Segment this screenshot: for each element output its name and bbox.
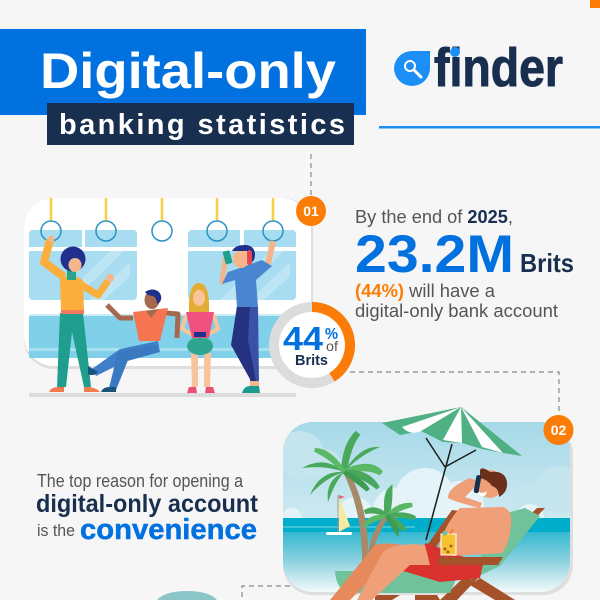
orange corner accent [590,0,600,8]
person: standing man with phone [222,241,273,393]
palm trees [302,433,415,562]
badge 01: 01 [303,203,319,219]
badge 02 [544,415,574,445]
donut: 44% of Brits: Brits [295,352,328,369]
badge 01 [296,196,326,226]
person: standing left [44,236,114,392]
person: seated man [88,290,178,392]
train windows [29,230,296,300]
text block: top reason: is the [37,521,75,540]
header rule [379,126,600,128]
text block: top reason: convenience [80,514,257,546]
text block: 23.2M Brits: (44%) will have a [355,281,496,301]
donut: 44% of Brits: of [326,338,338,354]
title: Digital-only [40,43,336,99]
beach scene background [276,422,584,592]
text block: 23.2M Brits [355,207,574,321]
donut: 44% of Brits [274,307,350,383]
seat band [29,314,294,358]
title [0,29,366,145]
text block: 23.2M Brits: digital-only bank account [355,301,558,321]
finder logo [394,38,563,98]
man on deckchair [330,468,545,600]
badge 02: 02 [551,422,566,438]
next section circle [157,591,217,600]
panel: beach illustration [276,407,584,600]
text block: 23.2M Brits: By the end of 2025, [355,207,513,227]
cocktail glass [441,529,456,555]
dashed connectors [242,154,559,600]
text block: top reason [36,471,259,546]
text block: top reason: The top reason for opening a [37,471,244,491]
sailboat [326,495,352,535]
floor [29,393,296,397]
text block: 23.2M Brits: Brits [520,248,574,278]
beach umbrella [382,407,522,540]
panel: train illustration [24,198,313,397]
donut: 44% of Brits: 44 [283,320,324,357]
donut: 44% of Brits: % [325,326,338,343]
finder logo: finder [434,38,563,98]
title: banking statistics [59,109,345,141]
person: seated woman [182,283,218,393]
text block: 23.2M Brits: 23.2M [355,225,514,284]
hand straps [41,198,283,241]
text block: top reason: digital-only account [36,490,259,518]
